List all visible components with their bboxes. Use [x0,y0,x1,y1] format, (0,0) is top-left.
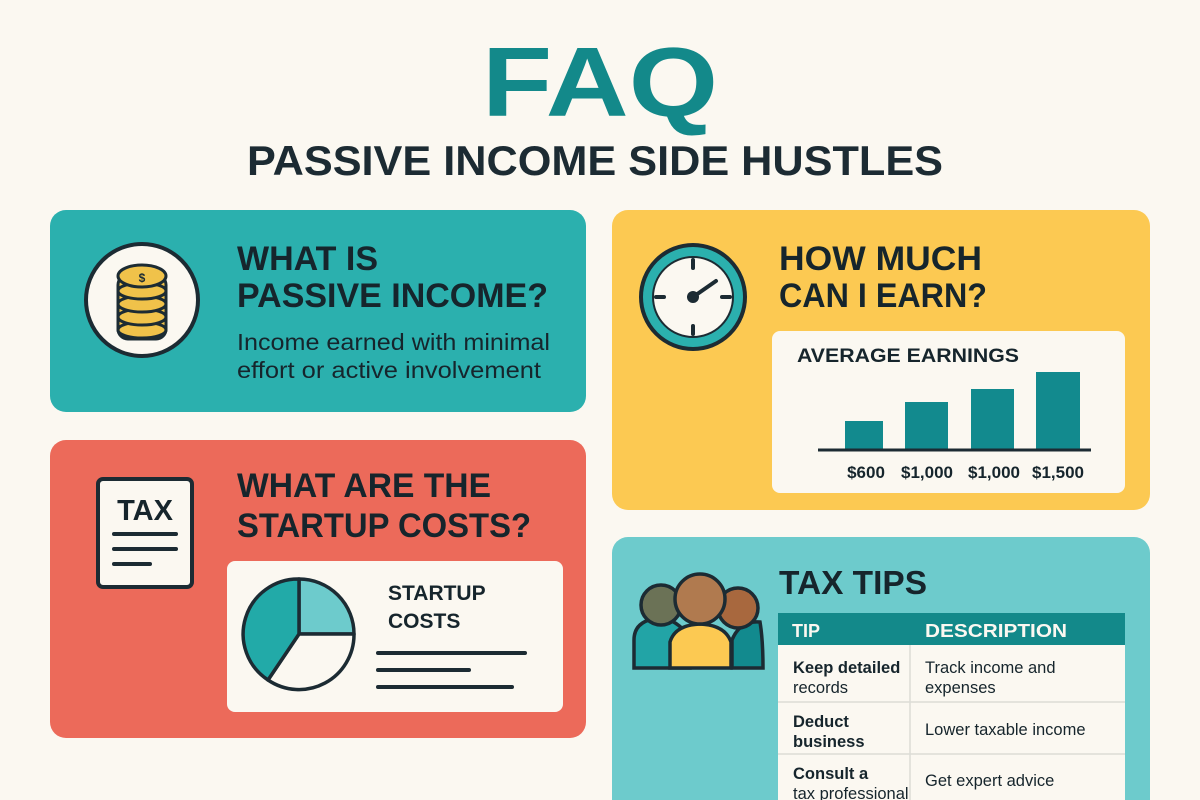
title: PASSIVE INCOME SIDE HUSTLES [247,137,943,184]
icon: coin stack: $ [139,271,146,285]
icon: tax document: TAX [117,495,174,527]
table: tax tips [778,613,1125,800]
panel: what is passive income [50,210,586,412]
panel: what is passive income: PASSIVE INCOME? [237,277,548,315]
table: tax tips: TIP [792,621,820,641]
icon: people [634,574,763,668]
bar chart: average earnings: $600 [847,463,885,482]
table: tax tips: expenses [925,679,996,697]
pie chart card [227,561,563,712]
table: tax tips: Keep detailed [793,659,900,677]
table: tax tips: Deduct [793,713,849,731]
panel: how much can I earn [612,210,1150,510]
icon: coin stack [86,244,198,356]
table: tax tips: business [793,733,865,751]
title: FAQ [482,27,718,137]
table: tax tips: records [793,679,848,697]
heading: TAX TIPS [779,564,927,601]
bar chart: average earnings [772,331,1125,493]
panel: what is passive income: effort or active involvement [237,357,542,383]
heading: WHAT IS [237,240,378,278]
heading: WHAT ARE THE [237,467,491,505]
heading: HOW MUCH [779,240,982,278]
bar chart: average earnings: $1,000 [968,463,1020,482]
panel: tax tips [612,537,1150,800]
title [247,27,943,184]
panel: startup costs: STARTUP COSTS? [237,507,531,545]
body text: Income earned with minimal [237,329,550,355]
icon: clock [641,245,745,349]
icon: tax document [98,479,192,587]
bar chart: average earnings: AVERAGE EARNINGS [797,346,1019,367]
bar chart: average earnings: $1,500 [1032,463,1084,482]
panel: startup costs [50,440,586,738]
table: tax tips: Get expert advice [925,772,1054,790]
pie chart card: COSTS [388,610,460,633]
bar chart: average earnings: $1,000 [901,463,953,482]
panel: how much can I earn: CAN I EARN? [779,277,987,315]
table: tax tips: Track income and [925,659,1056,677]
table: tax tips: Lower taxable income [925,721,1086,739]
pie chart card: STARTUP [388,582,486,605]
table: tax tips: Consult a [793,765,869,783]
table: tax tips: DESCRIPTION [925,621,1067,641]
